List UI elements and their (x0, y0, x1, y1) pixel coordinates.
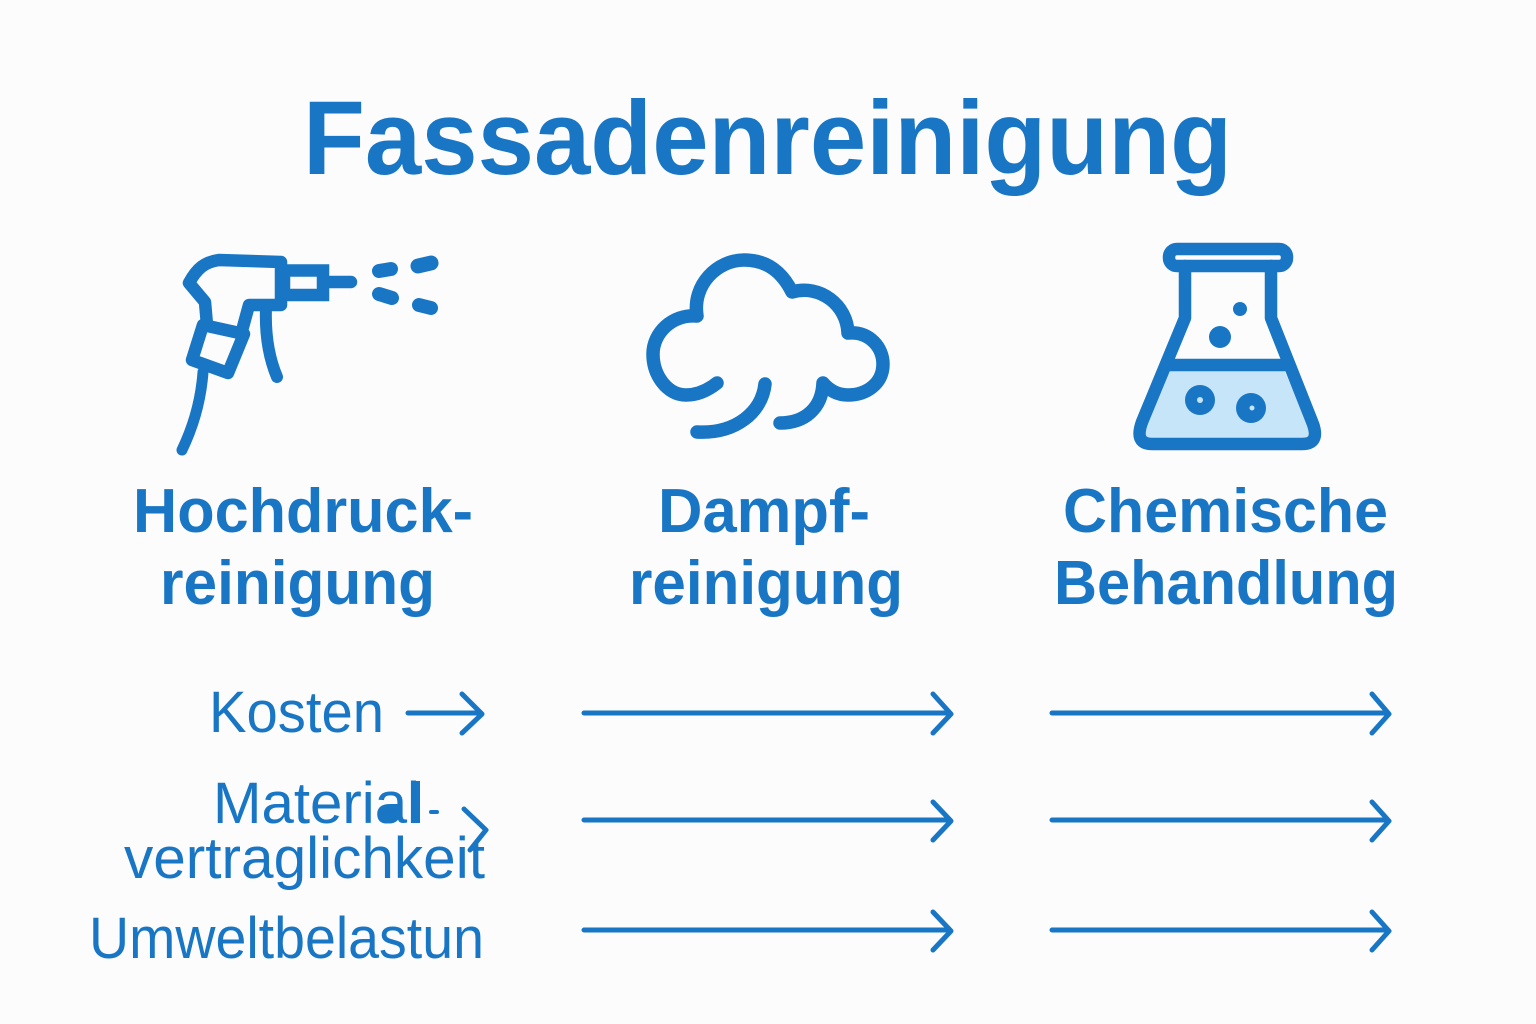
heading: Hochdruckreinigung: Hochdruck- (133, 477, 473, 546)
heading: Dampfreinigung: Dampf- (658, 477, 870, 546)
arrows: Umweltbelastung row (584, 912, 1389, 950)
icon: flask (1140, 249, 1315, 444)
heading: Chemische Behandlung: Chemische (1063, 477, 1388, 546)
bubbles (1185, 302, 1266, 423)
label: Materialvertraglichkeit (124, 771, 485, 891)
label: Umweltbelastung: Umweltbelastun (89, 906, 484, 971)
label: Materialvertraglichkeit: Material (213, 771, 420, 836)
flask liquid (1144, 370, 1311, 440)
label: Materialvertraglichkeit: vertraglichkeit (124, 826, 485, 891)
heading: Dampfreinigung (629, 477, 903, 618)
title: Fassadenreinigung (303, 80, 1232, 197)
heading: Hochdruckreinigung (133, 477, 473, 618)
heading: Chemische Behandlung (1054, 477, 1398, 618)
heading: Hochdruckreinigung: reinigung (160, 549, 435, 618)
label: Kosten: Kosten (209, 680, 384, 745)
arrows: Kosten row (408, 694, 1389, 733)
icon: steam cloud (653, 260, 883, 432)
heading: Chemische Behandlung: Behandlung (1054, 549, 1398, 618)
arrows: Materialvertraglichkeit row (464, 802, 1389, 850)
heading: Dampfreinigung: reinigung (629, 549, 903, 618)
icon: spray gun (182, 260, 431, 450)
flask outline (1140, 249, 1315, 444)
